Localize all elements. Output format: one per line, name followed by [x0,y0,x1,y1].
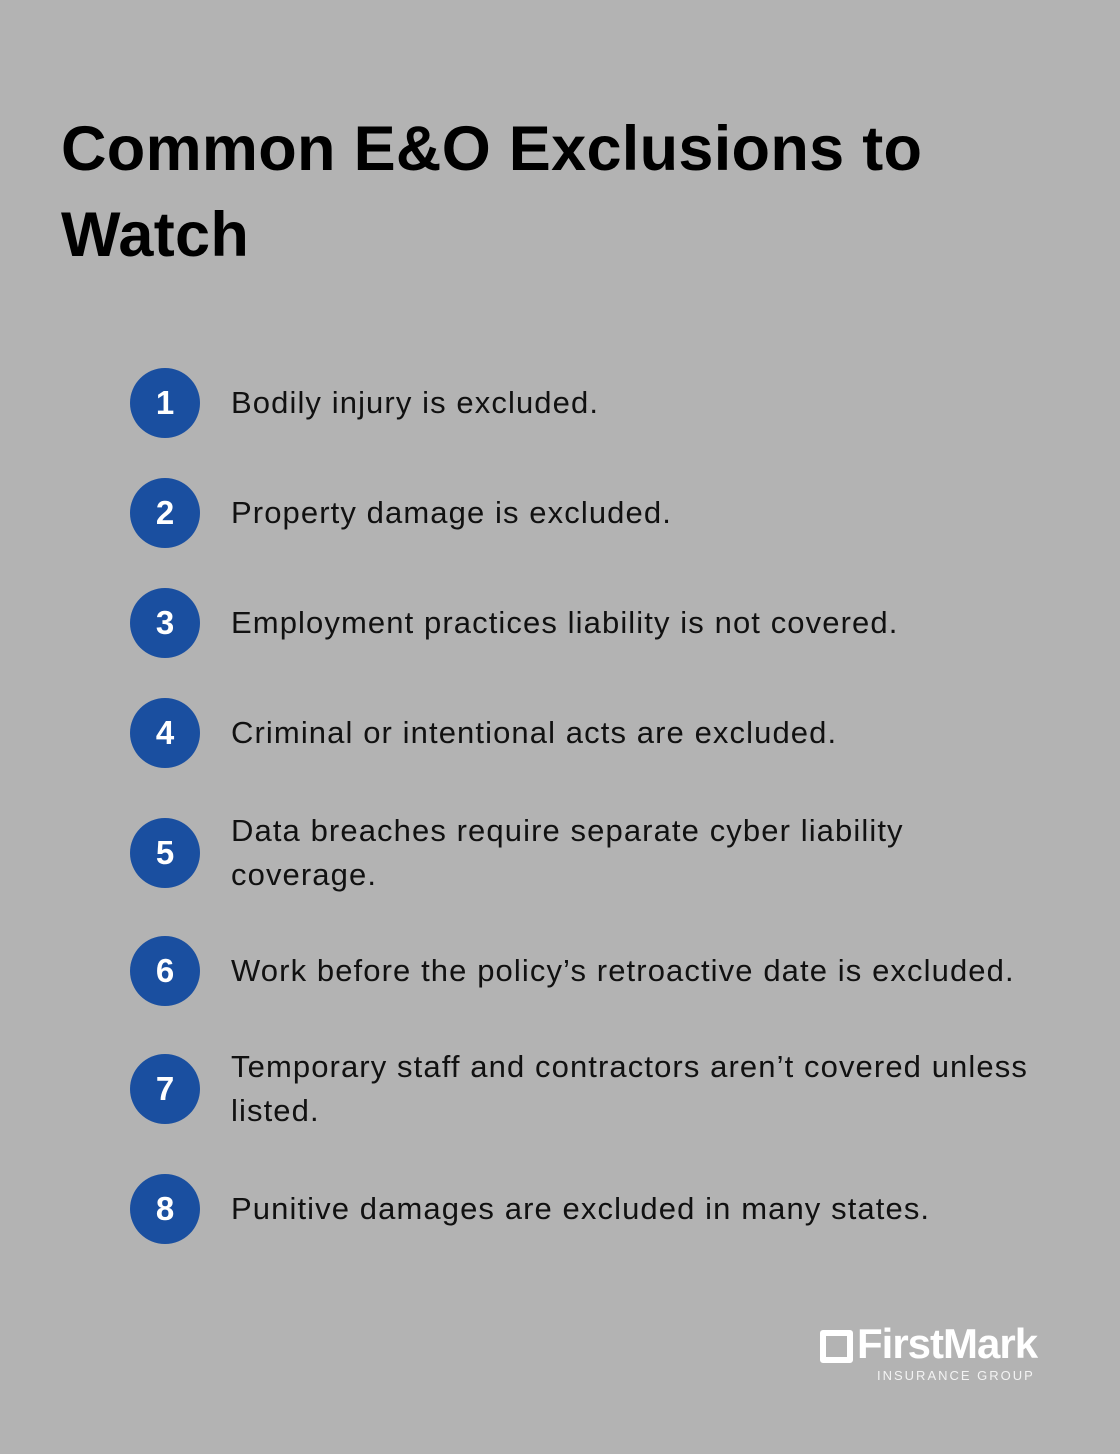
item 2 [130,478,672,548]
item 4 [130,698,837,768]
title: Watch [61,200,249,270]
item 2: Property damage is excluded. [231,495,672,530]
item 1 [130,368,599,438]
item 6: 6 [156,952,174,989]
item 7: listed. [231,1093,320,1128]
item 8: 8 [156,1190,174,1227]
item 5 [130,813,904,892]
logo: INSURANCE GROUP [877,1368,1035,1383]
item 3: 3 [156,604,174,641]
item 6: Work before the policy’s retroactive date is excluded. [231,953,1015,988]
item 6 [130,936,1015,1006]
item 8 [130,1174,930,1244]
item 5: 5 [156,834,174,871]
item 4: Criminal or intentional acts are excluded. [231,715,837,750]
logo [820,1320,1038,1383]
item 2: 2 [156,494,174,531]
item 3 [130,588,898,658]
item 7: Temporary staff and contractors aren’t covered unless [231,1049,1028,1084]
item 8: Punitive damages are excluded in many states. [231,1191,930,1226]
item 7 [130,1049,1028,1128]
title [61,114,922,270]
item 1: 1 [156,384,174,421]
item 5: Data breaches require separate cyber liability [231,813,904,848]
item 4: 4 [156,714,174,751]
item 7: 7 [156,1070,174,1107]
item 1: Bodily injury is excluded. [231,385,599,420]
title: Common E&O Exclusions to [61,114,922,184]
item 5: coverage. [231,857,377,892]
logo: FirstMark [857,1320,1037,1367]
item 3: Employment practices liability is not covered. [231,605,898,640]
